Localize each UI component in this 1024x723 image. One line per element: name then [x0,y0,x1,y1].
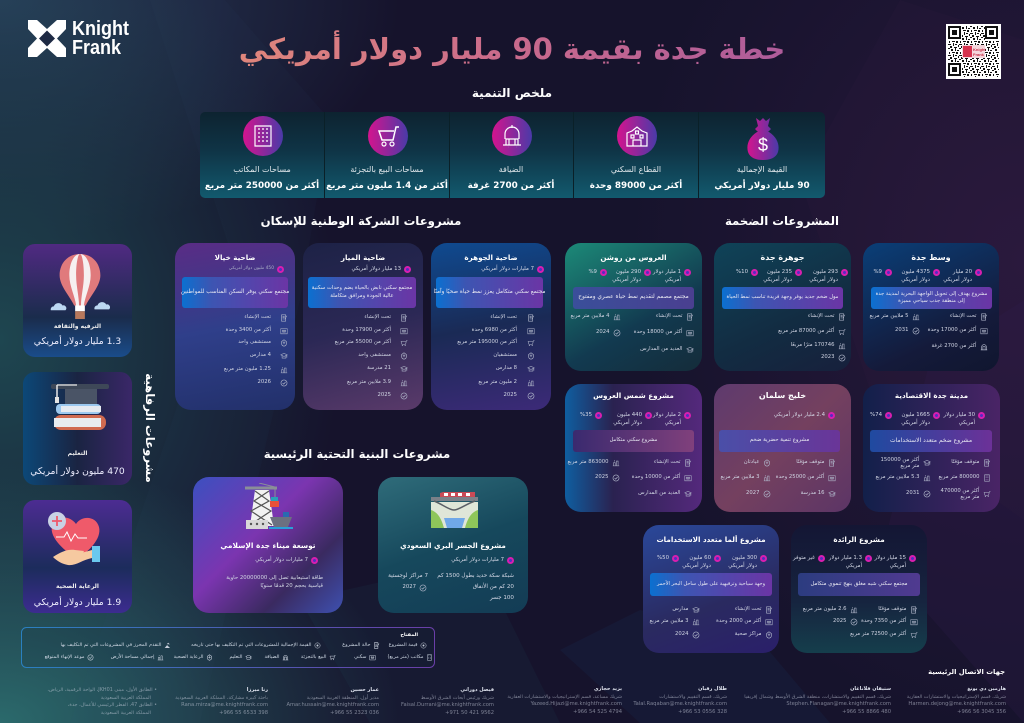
panel: Al Raeda project: أكثر من 7350 وحدة [861,618,906,624]
icon: bridge and train [431,492,478,528]
legend entries: موعد الإنهاء المتوقع [45,654,84,660]
panel: Central Jeddah: تحت الإنشاء [950,313,976,319]
office addresses: المملكة العربية السعودية [101,710,151,716]
panel: Central Jeddah: دولار أمريكي [943,277,972,283]
panel: Al Raeda project: أمريكي [890,563,906,569]
contact: Rana Mirza [175,687,268,716]
panel: Al Raeda project: أمريكي [846,563,862,569]
panel: Jawharat Jeddah: أكثر من 87000 متر مربع [778,328,834,334]
panel: Dahiyat Al Mayar: عالية الجودة ومرافق متكاملة [330,292,394,298]
stat: total value [714,118,810,191]
panel: Jeddah Economic City: مدينة جدة الاقتصادية [895,391,968,400]
panel: Jawharat Jeddah: جوهرة جدة [761,253,804,262]
panel: education: 470 مليون دولار أمريكي [30,466,125,477]
contact: Faisal Durrani [401,687,494,716]
heading: key contacts: جهات الاتصال الرئيسية [928,668,1005,676]
title [212,26,812,72]
contact: Amar Hussain: عمار حسين [350,687,379,693]
panel: Jeddah Economic City: 1665 مليون [902,412,930,418]
contact: Yazeed Hijazi: +966 54 525 4794 [573,709,622,715]
panel: Jawharat Jeddah: 2023 [821,354,834,360]
panel: Jawharat Jeddah: 235 مليون [767,269,792,275]
panel: Dahiyat Khayala: تحت الإنشاء [244,314,271,320]
logo: Knight Frank: Frank [72,36,121,58]
panel: Dahiyat Al Mayar: أكثر من 17900 وحدة [342,327,391,333]
panel: Dahiyat Khayala: 450 مليون دولار أمريكي [229,266,274,271]
panel: Central Jeddah: دولار أمريكي [901,277,930,283]
stat: hospitality: أكثر من 2700 غرفة [468,181,554,191]
QR code: Frank [973,52,985,57]
panel: Jawharat Jeddah: دولار أمريكي [763,277,792,283]
panel: Jawharat Jeddah: %10 [736,269,748,275]
panel: Jeddah Economic City: مشروع ضخم متعدد الاستخدامات [890,437,972,444]
panel: Dahiyat Khayala: أكثر من 3400 وحدة [226,327,271,333]
panel: healthcare: 1.9 مليار دولار أمريكي [34,597,121,608]
panel: healthcare: الرعاية الصحية [56,583,99,590]
panel: Dahiyat Khayala: 4 مدارس [250,352,271,358]
panel: Alma mixed-use project [643,525,779,653]
panel: Central Jeddah: وسط جدة [911,253,951,262]
stat: retail [325,112,450,198]
panel: Alma mixed-use project: مشروع ألما متعدد الاستخدامات [656,535,766,544]
panel: Alma mixed-use project: وجهة سياحية وترفيهية على طول ساحل البحر الأحمر [657,581,765,587]
contact: Faisal Durrani: شريك ورئيس أبحاث الشرق الأوسط [421,695,494,701]
stat: offices [200,112,325,198]
stat: total value: القيمة الإجمالية [737,165,787,174]
panel: Shams Al Arous: أمريكي [665,420,681,426]
panel: Dahiyat Al Jawhara: 2 مليون متر مربع [478,379,517,385]
heading: national housing company projects: مشروعات الشركة الوطنية للإسكان [261,214,461,228]
stat: residential [574,112,699,198]
panel: Al Raeda project: مجتمع سكني شبه مغلق بنهج تنموي متكامل [810,581,908,587]
panel: Jawharat Jeddah: 293 مليون [813,269,838,275]
panel: Central Jeddah: أكثر من 17000 وحدة [928,327,976,333]
panel: Salman Bay: مشروع تنمية حضرية ضخم [750,437,809,443]
contact: Amar Hussain: Amar.hussain@me.knightfrank.com [286,702,379,708]
contact: Stephen Flanagan: شريك، قسم التقييم والاستشارات، منطقة الشرق الأوسط وشمال إفريقيا [744,694,891,700]
panel: Jeddah Economic City: دولار أمريكي [901,420,930,426]
icon: hot-air balloon [50,254,110,320]
panel: Dahiyat Khayala: ضاحية خيالا [215,253,255,262]
panel: Al Arous by Roshn: تحت الإنشاء [656,313,682,319]
legend entries [44,642,432,661]
contact: Harmen de Jong: هارمين دي يونغ [967,686,1006,692]
panel: Saudi Land Bridge: 2027 [403,584,416,590]
stat: total value: $ [758,135,768,155]
icon: heart in hand [48,512,100,566]
panel: Jeddah Economic City: 30 مليار دولار [943,412,975,418]
panel: Shams Al Arous: مشروع شمس العروس [593,391,674,400]
stat: retail: مساحات البيع بالتجزئة [350,165,424,174]
legend entries: التقدم المحرز في المشروعات التي تم التكليف بها [60,642,162,648]
panel: Central Jeddah: أكثر من 2700 غرفة [932,343,976,349]
panel: Shams Al Arous: 2025 [595,474,608,480]
panel: Jeddah Islamic Port expansion: قياسية بحجم 20 قدمًا سنويًا [260,583,323,589]
panel: Saudi Land Bridge [378,477,528,613]
contact: Stephen Flanagan: Stephen.Flanagan@me.knightfrank.com [786,701,891,707]
legend [21,627,435,668]
panel: Al Arous by Roshn: دولار أمريكي [612,277,641,283]
contact: Talal Raqaban: شريك، قسم التقييم والاستشارات [659,694,727,700]
contact: Stephen Flanagan: +966 55 8866 480 [842,709,891,715]
contact: Stephen Flanagan: ستيفان فلاناغان [850,686,891,692]
panel: Dahiyat Khayala [175,243,295,410]
panel: Central Jeddah: 5 ملايين متر مربع [870,313,908,319]
contact: Talal Raqaban [633,686,727,715]
contact: Yazeed Hijazi [507,686,622,715]
panel: Dahiyat Al Jawhara: ضاحية الجوهرة [464,253,518,262]
panel: Al Raeda project: 1.3 مليار دولار [829,555,862,561]
contact: Yazeed Hijazi: Yazeed.Hijazi@me.knightfrank.com [531,701,622,707]
panel: Central Jeddah: 2031 [895,327,908,333]
legend entries: سكني [354,654,366,660]
contact: Rana Mirza: +966 55 6533 398 [219,710,268,716]
panel: Dahiyat Al Mayar: 13 مليار دولار أمريكي [351,266,401,272]
legend entries: القيمة الإجمالية للمشروعات التي تم التكليف بها حتى تاريخه [191,642,312,648]
contact: Talal Raqaban: +966 53 0556 328 [678,709,727,715]
legend entries: حالة المشروع [342,642,370,648]
panel: Alma mixed-use project: دولار أمريكي [728,563,757,569]
panel: Dahiyat Khayala: مجتمع سكني يوفر السكن المناسب للمواطنين [181,289,289,295]
panel: Shams Al Arous: أكثر من 10000 وحدة [632,474,680,480]
panel: Central Jeddah: 4375 مليون [902,269,930,275]
panel: Dahiyat Al Mayar: 3.9 ملايين متر مربع [347,379,391,385]
panel: Shams Al Arous: 863000 متر مربع [567,459,608,465]
contact: Amar Hussain: مدير أول، المنطقة الغربية السعودية [307,695,379,701]
panel: Salman Bay: متوقف مؤقتًا [796,459,824,465]
panel: Dahiyat Al Mayar: أكثر من 55000 متر مربع [335,339,391,345]
panel: Jawharat Jeddah: تحت الإنشاء [808,313,834,319]
panel: Shams Al Arous: %35 [580,412,592,418]
legend entries: مكاتب (متر مربع) [388,654,424,660]
panel: entertainment and culture [23,244,132,357]
title: خطة جدة بقيمة 90 مليار دولار أمريكي [239,32,785,66]
panel: Jeddah Economic City: أكثر من 470000 [940,488,980,494]
panel: Al Raeda project: 15 مليار دولار [874,555,906,561]
contact: Amar Hussain: +966 55 2323 036 [330,710,379,716]
panel: Shams Al Arous: تحت الإنشاء [654,459,680,465]
panel: Alma mixed-use project: 2024 [675,631,688,637]
panel: Saudi Land Bridge: 7 مليارات دولار أمريكي [451,557,504,563]
panel: Shams Al Arous: مشروع سكني متكامل [610,437,657,443]
stat: residential: القطاع السكني [611,165,661,174]
panel: Jeddah Islamic Port expansion [193,477,343,613]
panel: Dahiyat Khayala: 2026 [258,379,271,385]
panel: Central Jeddah: إلى منطقة جذب سياحي مميزة [898,298,965,304]
panel: Saudi Land Bridge: 100 جسر [490,595,514,601]
panel: development summary [200,112,825,198]
panel: Al Raeda project: 2025 [833,618,846,624]
QR code: Knight [973,47,986,52]
panel: Al Arous by Roshn: العروس من روشن [600,253,667,262]
panel: Jawharat Jeddah [714,243,851,371]
panel: Dahiyat Al Mayar: ضاحية الميار [341,253,385,262]
panel: Jeddah Economic City: متر مربع [960,494,980,500]
legend entries: الرعاية الصحية [174,654,204,660]
panel: Jeddah Economic City: 2031 [906,490,920,496]
contact: Harmen de Jong: +966 56 3045 356 [957,709,1006,715]
contact: Talal Raqaban: Talal.Raqaban@me.knightfrank.com [633,701,727,707]
panel: Dahiyat Al Mayar: مستشفى واحد [358,352,391,358]
panel: Al Arous by Roshn: أكثر من 18000 وحدة [634,329,682,335]
heading: development summary: ملخص التنمية [472,86,552,100]
panel: Jawharat Jeddah: مول ضخم جديد يوفر وجهة فريدة تناسب نمط الحياة [727,294,838,300]
office addresses: • الطابق الأول، مبنى JKH01، الواحة الرقمية، الرياض، [47,687,157,693]
panel: healthcare [23,500,132,613]
panel: Alma mixed-use project: 60 مليون [689,555,711,561]
panel: Salman Bay: 2027 [746,490,760,496]
panel: Al Raeda project: 2.6 مليون متر مربع [803,606,846,612]
stat: hospitality [449,112,574,198]
panel: Salman Bay: 3 ملايين متر مربع [721,474,760,480]
panel: Shams Al Arous: دولار أمريكي [613,420,642,426]
panel: Al Arous by Roshn [565,243,702,371]
panel: Alma mixed-use project: أكثر من 2000 وحدة [716,618,762,624]
panel: Dahiyat Al Jawhara: أكثر من 195000 متر مربع [457,339,517,345]
panel: Salman Bay: 2.4 مليار دولار أمريكي [774,412,825,418]
legend entries: التعليم [229,654,242,660]
panel: Jeddah Economic City: 800000 متر مربع [938,474,980,480]
panel: Salman Bay: خليج سلمان [759,391,806,400]
panel: education [23,372,132,485]
panel: Alma mixed-use project: مراكز صحية [735,631,762,637]
office addresses: • الطابق 47، الفطر الرئيسي للأعمال، جدة، [68,702,157,708]
stat: offices: مساحات المكاتب [233,165,291,174]
panel: Shams Al Arous [565,384,702,512]
panel: Jeddah Economic City: أكثر من 150000 [880,456,920,462]
panel: Saudi Land Bridge: مشروع الجسر البري السعودي [400,541,506,550]
stat: retail: أكثر من 1.4 مليون متر مربع [326,181,448,191]
panel: Jeddah Economic City: متوقف مؤقتًا [951,459,980,465]
panel: Saudi Land Bridge: 20 كم من الأنفاق [473,584,514,590]
contact: Harmen de Jong: شريك، قسم الإستراتيجيات والاستشارات العقارية [907,694,1006,700]
panel: Alma mixed-use project: مدارس [672,606,688,612]
contact: Rana Mirza: رنا ميرزا [247,687,268,693]
panel: education: التعليم [68,450,87,457]
QR code [946,24,1001,79]
panel: Shams Al Arous: العديد من المدارس [638,490,680,496]
office addresses [47,686,157,716]
contact: Harmen de Jong: Harmen.dejong@me.knightfrank.com [908,701,1006,707]
panel: Al Raeda project [791,525,927,653]
panel: Jeddah Economic City: متر مربع [900,462,920,468]
legend title: المفتاح [400,632,418,638]
panel: Al Arous by Roshn: 1 مليار دولار [653,269,681,275]
contact: Stephen Flanagan [744,686,891,715]
contact: Harmen de Jong [907,686,1006,715]
panel: Jeddah Islamic Port expansion: 7 مليارات دولار أمريكي [255,557,308,563]
stat: hospitality: الضيافة [499,165,523,174]
panel: Al Arous by Roshn: 4 ملايين متر مربع [571,313,610,319]
panel: entertainment and culture: الترفيه والثقافة [54,323,101,330]
legend entries: الضيافة [264,654,280,660]
panel: Alma mixed-use project: دولار أمريكي [682,563,711,569]
panel: Jeddah Islamic Port expansion: طاقة استيعابية تصل إلى 20000000 حاوية [226,575,323,581]
panel: Al Arous by Roshn: مجتمع مصمم لتقديم نمط حياة عصري ومفتوح [578,294,689,300]
office addresses: المملكة العربية السعودية [101,695,151,701]
logo: Knight Frank [28,18,129,58]
panel: Central Jeddah: %9 [873,269,882,275]
panel: Al Arous by Roshn: أمريكي [665,277,681,283]
icon: books and graduation cap [51,384,109,430]
heading: wellness projects (vertical): مشروعات الرفاهية [143,373,157,483]
panel: Al Raeda project: مشروع الرائدة [833,535,885,544]
panel: Dahiyat Al Mayar: تحت الإنشاء [364,314,391,320]
contact: Faisal Durrani: +971 50 421 9562 [445,710,494,716]
panel: Alma mixed-use project: 3 ملايين متر مربع [650,618,688,624]
panel: Dahiyat Khayala: 1.25 مليون متر مربع [224,366,271,372]
panel: Alma mixed-use project: تحت الإنشاء [735,606,762,612]
panel: Shams Al Arous: 440 مليون [617,412,642,418]
legend entries: البيع بالتجزئة [301,654,326,660]
panel: Dahiyat Al Jawhara: مستشفيان [493,352,517,358]
panel: Dahiyat Al Mayar: 2025 [378,392,391,398]
panel: Shams Al Arous: 2 مليار دولار [653,412,681,418]
panel: Al Arous by Roshn: %9 [588,269,597,275]
panel: Dahiyat Al Mayar: مجتمع سكني نابض بالحياة يضم وحدات سكنية [312,285,412,291]
contact: Yazeed Hijazi: يزيد حجازي [594,686,622,692]
panel: Saudi Land Bridge: شبكة سكة حديد بطول 1500 كم [437,573,514,579]
panel: Salman Bay: أكثر من 25000 وحدة [776,474,824,480]
logo: Knight Frank: Knight [72,18,129,40]
panel: Central Jeddah: 20 مليار [953,269,972,275]
icon: port crane and ship [245,483,293,529]
panel: Salman Bay: 16 مدرسة [801,490,824,496]
contact: Rana Mirza: Rana.mirza@me.knightfrank.com [181,702,268,708]
panel: entertainment and culture: 1.3 مليار دولار أمريكي [34,336,121,347]
contact: Rana Mirza: باحثة كبيرة مشاركة، المملكة العربية السعودية [175,695,268,701]
panel: Jawharat Jeddah: 170746 مترًا مربعًا [791,342,834,348]
contact: Yazeed Hijazi: شريك مساعد، قسم الإستراتيجيات والاستشارات العقارية [507,694,622,700]
panel: Jeddah Islamic Port expansion: توسعة ميناء جدة الإسلامي [220,541,316,550]
panel: Al Arous by Roshn: 2024 [596,329,610,335]
heading: mega projects: المشروعات الضخمة [725,214,839,228]
panel: Jeddah Economic City: أمريكي [959,420,975,426]
panel: Dahiyat Khayala: مستشفى واحد [238,339,271,345]
stat: offices: أكثر من 250000 متر مربع [205,181,319,191]
panel: Salman Bay [714,384,851,512]
panel: Al Raeda project: غير متوفر [793,555,815,561]
panel: Jeddah Economic City: %74 [870,412,882,418]
stat: total value: 90 مليار دولار أمريكي [714,181,810,191]
panel: Central Jeddah [863,243,999,371]
contact: Faisal Durrani: Faisal.Durrani@me.knightfrank.com [401,702,494,708]
panel: Jeddah Economic City: 5.3 ملايين متر مربع [875,474,920,480]
contact: Talal Raqaban: طلال رقبان [698,686,727,692]
panel: Al Raeda project: متوقف مؤقتًا [878,606,906,612]
panel: Saudi Land Bridge: 7 مراكز لوجستية [388,573,428,579]
panel: Dahiyat Al Jawhara [431,243,551,410]
contact: Amar Hussain [286,687,379,716]
panel: Dahiyat Al Mayar: 21 مدرسة [367,365,391,371]
panel: Alma mixed-use project: %50 [657,555,669,561]
panel: Dahiyat Al Jawhara: 8 مدارس [496,365,517,371]
panel: Dahiyat Al Mayar [303,243,423,410]
panel: Dahiyat Al Jawhara: تحت الإنشاء [490,314,517,320]
legend entries: إجمالي مساحة الأرض [111,654,154,660]
legend entries: قيمة المشروع [389,642,418,648]
panel: Dahiyat Al Jawhara: أكثر من 6980 وحدة [472,327,517,333]
contact: Faisal Durrani: فيصل دوراني [460,687,494,693]
stat: residential: أكثر من 89000 وحدة [590,181,682,191]
panel: Al Arous by Roshn: العديد من المدارس [640,346,682,352]
panel: Dahiyat Al Jawhara: مجتمع سكني متكامل يعزز نمط حياة صحيًا وآمنًا [434,289,545,295]
heading: infrastructure projects: مشروعات البنية التحتية الرئيسية [264,447,450,461]
panel: Alma mixed-use project: 300 مليون [732,555,757,561]
panel: Salman Bay: عيادتان [744,459,760,465]
panel: Dahiyat Al Jawhara: 2025 [504,392,517,398]
panel: Dahiyat Al Jawhara: 7 مليارات دولار أمريكي [481,266,534,272]
panel: Central Jeddah: مشروع يهدف إلى تحويل الواجهة البحرية لمدينة جدة [876,290,987,296]
panel: Al Arous by Roshn: 290 مليون [616,269,641,275]
panel: Al Raeda project: أكثر من 72500 متر مربع [850,631,906,637]
panel: Jawharat Jeddah: دولار أمريكي [809,277,838,283]
panel: Jeddah Economic City [863,384,1000,512]
